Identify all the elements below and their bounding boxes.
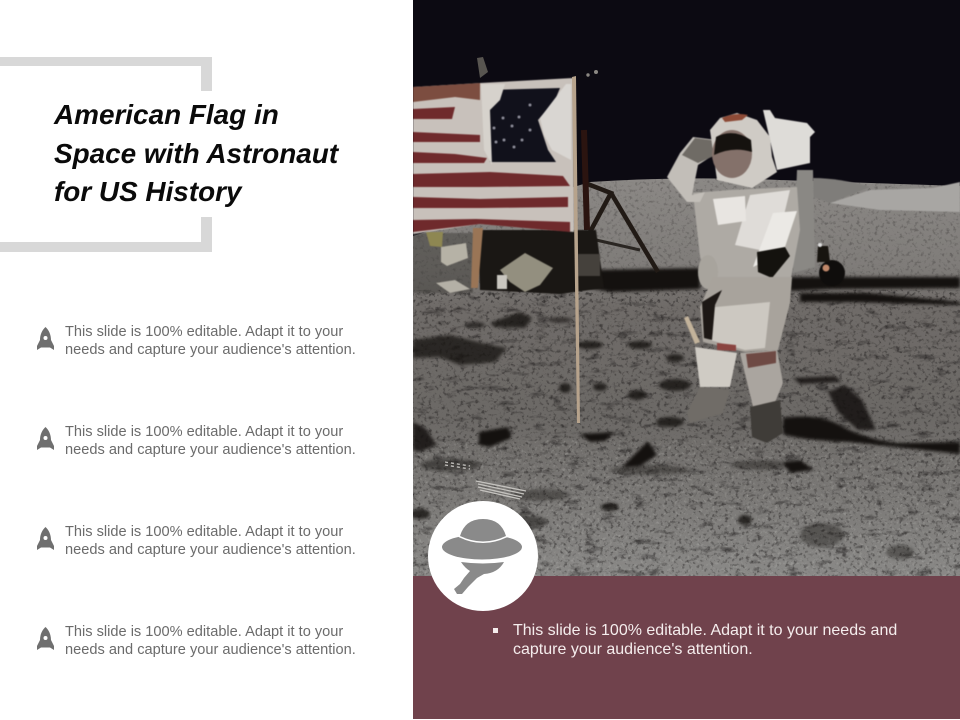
debris under the flag xyxy=(413,228,604,294)
lunar module struts xyxy=(584,130,658,272)
astronaut xyxy=(667,110,845,443)
panel text xyxy=(513,622,897,658)
right knee band xyxy=(746,351,776,368)
visor xyxy=(712,130,752,178)
title frame bracket xyxy=(0,57,212,252)
distant hills xyxy=(813,178,960,212)
thigh highlight xyxy=(705,302,770,350)
text item 3: This slide is 100% editable. Adapt it to your xyxy=(65,524,343,540)
lunar ground xyxy=(413,178,960,576)
torso xyxy=(693,187,800,285)
glove xyxy=(682,138,718,163)
flag debris above xyxy=(477,57,598,78)
black glove xyxy=(757,247,790,278)
icon: ufo in white circle xyxy=(428,501,538,611)
raised arm xyxy=(667,137,717,202)
text item 3 xyxy=(37,524,356,558)
flag pole xyxy=(572,76,580,423)
american flag xyxy=(413,78,574,234)
helmet xyxy=(710,113,777,188)
waist and legs xyxy=(700,277,792,352)
hip bag xyxy=(698,255,718,289)
left boot xyxy=(687,387,730,423)
bullet xyxy=(493,628,498,633)
canton xyxy=(486,88,560,162)
title: Space with Astronaut xyxy=(54,138,338,168)
text item 1 xyxy=(37,324,356,358)
title: for US History xyxy=(54,176,242,207)
title: American Flag in xyxy=(54,99,279,130)
text item 4: This slide is 100% editable. Adapt it to your xyxy=(65,624,343,640)
right boot xyxy=(750,400,783,443)
panel text: capture your audience's attention. xyxy=(513,641,753,658)
sky xyxy=(413,0,960,240)
visor dark xyxy=(714,133,752,155)
text item 2: This slide is 100% editable. Adapt it to your xyxy=(65,424,343,440)
right arm xyxy=(753,211,797,267)
maroon panel xyxy=(413,576,960,719)
title xyxy=(54,99,340,207)
chest pack xyxy=(713,196,746,225)
text item 2 xyxy=(37,424,356,458)
suit highlight xyxy=(735,190,790,250)
rover xyxy=(817,243,845,286)
photo: astronaut and flag on the moon xyxy=(413,0,960,576)
text item 3: needs and capture your audience's attention. xyxy=(65,542,356,558)
text item 4: needs and capture your audience's attention. xyxy=(65,642,356,658)
text item 1: This slide is 100% editable. Adapt it to your xyxy=(65,324,343,340)
panel text: This slide is 100% editable. Adapt it to your needs and xyxy=(513,622,897,639)
thigh shadow xyxy=(702,290,722,340)
boot track stripes xyxy=(445,462,526,499)
ground shadows and craters xyxy=(410,268,960,559)
text item 1: needs and capture your audience's attention. xyxy=(65,342,356,358)
text item 4 xyxy=(37,624,356,658)
left knee band xyxy=(717,343,736,351)
text item 2: needs and capture your audience's attention. xyxy=(65,442,356,458)
helmet stripe xyxy=(722,114,748,122)
right shin xyxy=(740,350,783,407)
left shin xyxy=(695,347,737,387)
backpack xyxy=(763,110,815,170)
tool xyxy=(684,316,700,344)
